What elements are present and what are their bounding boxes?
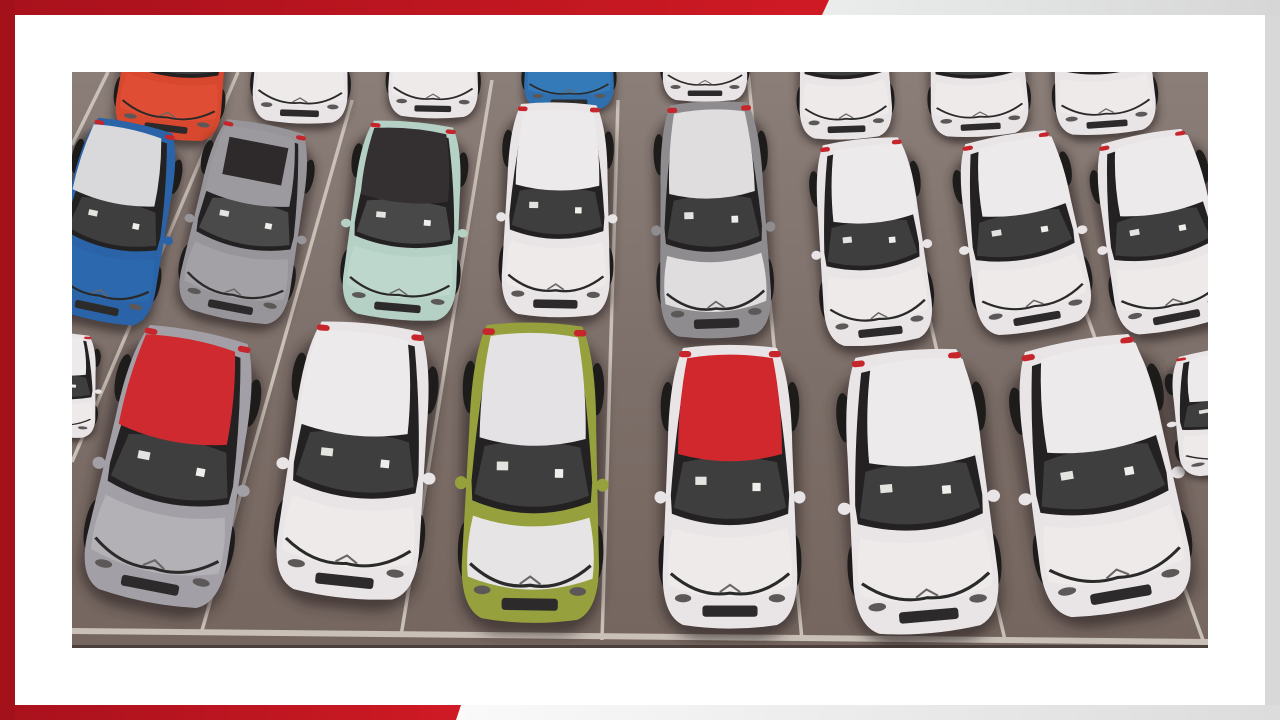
car: white xyxy=(941,124,1105,349)
car: red hatchback, top row xyxy=(105,0,244,152)
car: silver Nissan xyxy=(166,113,327,338)
car: white, cut off at right xyxy=(1155,338,1280,487)
car: white, top row xyxy=(1040,0,1164,145)
car: silver with red roof xyxy=(66,316,278,628)
car: white with red roof xyxy=(655,345,805,639)
car: white, top row xyxy=(789,0,899,148)
car: white xyxy=(825,343,1012,651)
car: mint with black roof xyxy=(332,116,477,333)
car: silver Lexus with white roof xyxy=(647,99,780,349)
parking lines xyxy=(72,72,1208,642)
car: white xyxy=(993,325,1209,636)
pavement bottom edge xyxy=(72,645,1208,648)
car: olive with white roof and hood xyxy=(452,321,612,636)
car: white, cut off at right xyxy=(1077,122,1244,349)
car: white, top row xyxy=(918,0,1036,146)
car: white xyxy=(262,315,451,617)
car: blue, top row xyxy=(519,0,619,116)
car: white, top row xyxy=(658,0,752,107)
car: white xyxy=(800,133,943,359)
car: white with black pillars xyxy=(494,101,620,326)
car: white Nissan, top row xyxy=(382,0,486,125)
sunroof on silver car xyxy=(222,137,288,186)
photo: aerial view of parked cars xyxy=(72,72,1208,648)
car: blue with white roof xyxy=(33,111,195,340)
car: white, cut off at left xyxy=(10,330,106,444)
asphalt ground xyxy=(72,72,1208,648)
car: white, top row xyxy=(246,0,358,132)
